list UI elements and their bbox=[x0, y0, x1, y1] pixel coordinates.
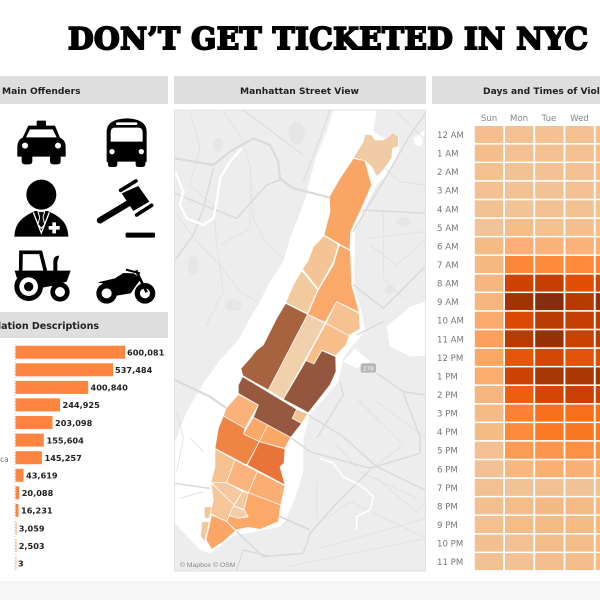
bar chart: violation descriptions: ca bbox=[0, 455, 9, 464]
icon: bus bbox=[107, 118, 147, 167]
heatmap day axis bbox=[481, 114, 589, 124]
bar chart: violation descriptions: 155,604 bbox=[46, 435, 84, 445]
heatmap hour axis: 5 AM bbox=[437, 224, 458, 234]
header: manhattan street view bbox=[174, 76, 426, 104]
header: days and times bbox=[432, 76, 600, 104]
header: main offenders: Main Offenders bbox=[2, 87, 81, 97]
heatmap hour axis: 8 PM bbox=[437, 502, 458, 512]
bar chart: violation descriptions: 16,231 bbox=[21, 506, 53, 516]
heatmap hour axis: 9 PM bbox=[437, 521, 458, 531]
heatmap hour axis: 4 PM bbox=[437, 428, 458, 438]
heatmap hour axis bbox=[437, 131, 464, 568]
neighbourhood polygons bbox=[201, 132, 398, 549]
heatmap: days and times bbox=[475, 126, 600, 570]
map frame bbox=[174, 110, 426, 571]
bar chart: violation descriptions: 400,840 bbox=[90, 383, 128, 393]
bar chart: violation descriptions: 600,081 bbox=[127, 348, 165, 358]
heatmap hour axis: 10 AM bbox=[437, 317, 464, 327]
bar chart: violation descriptions bbox=[0, 344, 165, 572]
panel: manhattan map bbox=[174, 110, 430, 571]
heatmap hour axis: 7 AM bbox=[437, 261, 458, 271]
bar chart: violation descriptions: 3,059 bbox=[19, 523, 45, 533]
heatmap hour axis: 5 PM bbox=[437, 447, 458, 457]
streams bbox=[175, 148, 373, 530]
icons: main offenders bbox=[14, 118, 155, 304]
bar chart: violation descriptions: 244,925 bbox=[62, 400, 100, 410]
icon: gavel bbox=[100, 181, 155, 238]
heatmap hour axis: 6 PM bbox=[437, 465, 458, 475]
bar chart: violation descriptions: 20,088 bbox=[22, 488, 54, 498]
map attribution: © Mapbox © OSM bbox=[180, 561, 236, 569]
roads bbox=[175, 110, 427, 570]
footer strip bbox=[0, 581, 600, 600]
heatmap hour axis: 2 AM bbox=[437, 168, 458, 178]
highway shield: 278 bbox=[363, 366, 374, 372]
icon: motorcycle bbox=[96, 270, 155, 304]
heatmap hour axis: 2 PM bbox=[437, 391, 458, 401]
bar chart: violation descriptions: 43,619 bbox=[26, 470, 58, 480]
bar chart: violation descriptions: 3 bbox=[18, 558, 24, 568]
water bbox=[175, 110, 430, 553]
highway shield bbox=[361, 363, 376, 373]
thin streets bbox=[177, 112, 427, 567]
heatmap hour axis: 9 AM bbox=[437, 298, 458, 308]
heatmap hour axis: 10 PM bbox=[437, 540, 463, 550]
bar chart: violation descriptions: 537,484 bbox=[115, 365, 153, 375]
heatmap hour axis: 3 AM bbox=[437, 187, 458, 197]
heatmap hour axis: 4 AM bbox=[437, 205, 458, 215]
heatmap hour axis: 12 PM bbox=[437, 354, 463, 364]
header: main offenders bbox=[0, 76, 168, 104]
icon: person bbox=[14, 180, 68, 237]
heatmap hour axis: 11 PM bbox=[437, 558, 463, 568]
heatmap hour axis: 8 AM bbox=[437, 280, 458, 290]
header: manhattan street view: Manhattan Street View bbox=[240, 87, 360, 97]
heatmap day axis: Wed bbox=[570, 114, 589, 124]
heatmap day axis: Sun bbox=[481, 114, 497, 124]
heatmap hour axis: 7 PM bbox=[437, 484, 458, 494]
parks bbox=[188, 122, 411, 311]
heatmap hour axis: 6 AM bbox=[437, 242, 458, 252]
icon: tractor bbox=[14, 252, 71, 302]
bar chart: violation descriptions: 203,098 bbox=[55, 418, 93, 428]
heatmap day axis: Mon bbox=[510, 114, 528, 124]
bar chart: violation descriptions: 145,257 bbox=[44, 453, 82, 463]
header: violation descriptions bbox=[0, 312, 168, 338]
heatmap hour axis: 12 AM bbox=[437, 131, 464, 141]
bar chart: violation descriptions: 2,503 bbox=[19, 541, 45, 551]
heatmap hour axis: 1 PM bbox=[437, 372, 458, 382]
heatmap hour axis: 3 PM bbox=[437, 410, 458, 420]
icon: taxi bbox=[17, 121, 66, 164]
title: DON’T GET TICKETED IN NYC bbox=[68, 21, 588, 56]
heatmap day axis: Tue bbox=[541, 114, 556, 124]
heatmap hour axis: 11 AM bbox=[437, 335, 464, 345]
heatmap hour axis: 1 AM bbox=[437, 150, 458, 160]
